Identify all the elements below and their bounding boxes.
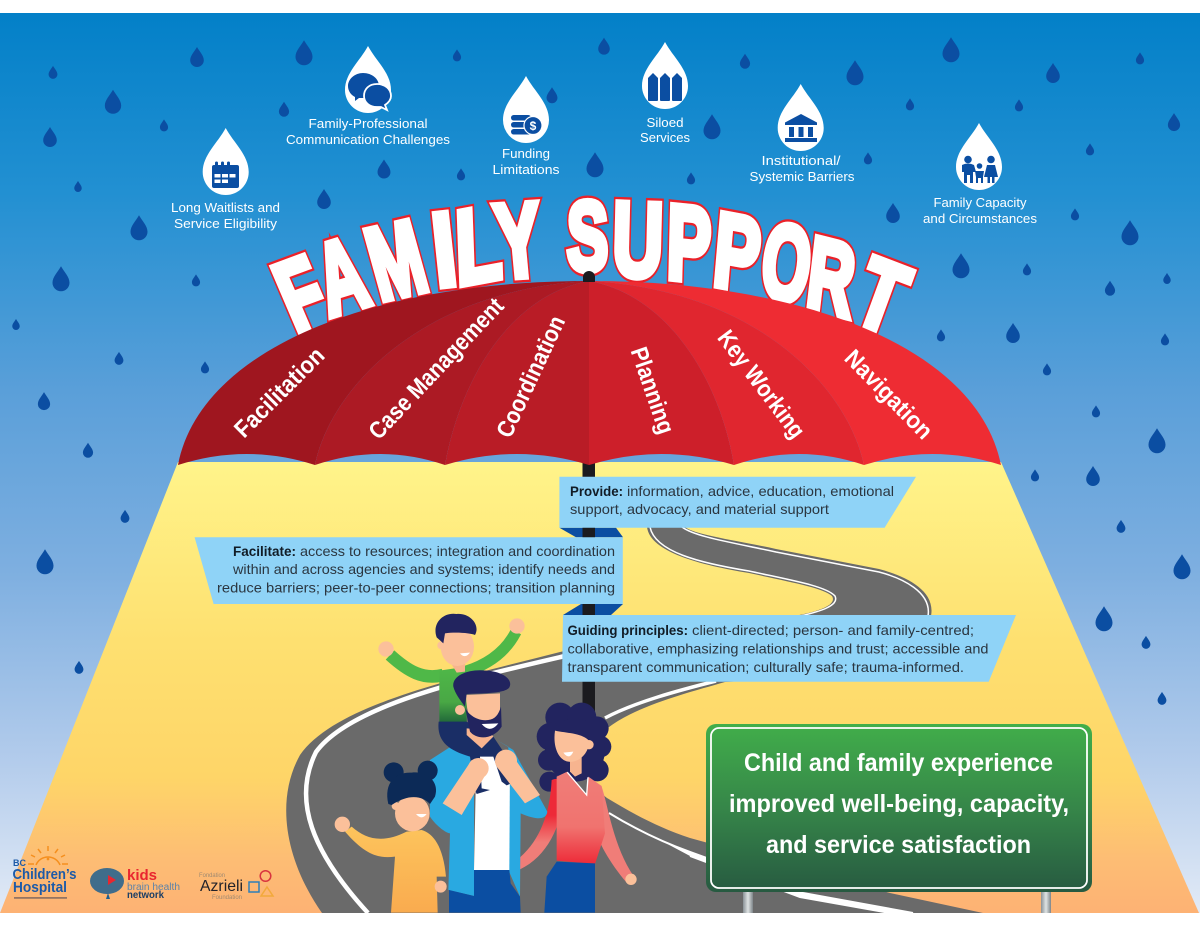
barrier: institutional barriers: Institutional/ (762, 153, 841, 168)
logo: kids brain health network: kids (127, 867, 157, 884)
ribbon connector lower (563, 604, 623, 615)
barrier: communication challenges: Communication Challenges (286, 132, 451, 147)
barrier: siloed services (640, 42, 690, 145)
title: FAMILY SUPPORT (260, 180, 921, 356)
logo: BC Children's Hospital: Children’s (12, 866, 76, 883)
info box: Guiding principles: collaborative, emphasizing relationships and trust; accessible and (568, 640, 988, 656)
info box: Facilitate: within and across agencies and systems; identify needs and (232, 561, 615, 577)
distant winding road (647, 527, 932, 616)
result sign: improved well-being, capacity, (729, 790, 1069, 818)
icon: silos (648, 73, 682, 101)
info box: Guiding principles: client-directed; person- and family-centred; (692, 622, 974, 638)
sign posts (743, 892, 1051, 913)
info box: Guiding principles (562, 615, 1016, 682)
info box: Provide: support, advocacy, and material support (570, 501, 829, 517)
label: Navigation: Navigation (839, 345, 938, 445)
info box: Provide (559, 477, 916, 528)
icon: family figures (962, 156, 998, 183)
barrier: long waitlists (171, 128, 280, 231)
icon: coins: $ (530, 119, 537, 133)
info box: Provide: information, advice, education, emotional (627, 483, 894, 499)
family illustration (335, 614, 637, 913)
canopy panel: Key Working (589, 281, 864, 465)
figure: mother (520, 703, 637, 913)
info box: Facilitate: access to resources; integration and coordination (300, 543, 615, 559)
barrier: funding limitations: Funding (502, 146, 550, 161)
label: Facilitation: Facilitation (229, 342, 330, 443)
sign board (706, 724, 1092, 892)
barrier: funding limitations (492, 76, 560, 177)
info box: Facilitate (195, 537, 623, 604)
logo: kids brain health network (90, 867, 180, 901)
raindrops (12, 37, 1190, 705)
barrier: communication challenges: Family-Professional (308, 116, 428, 131)
figure: girl (335, 761, 447, 913)
logo: Azrieli Foundation: Foundation (212, 895, 242, 901)
brain mark (90, 868, 124, 899)
barrier: funding limitations: Limitations (492, 162, 560, 177)
logo: BC Children's Hospital: Hospital (13, 879, 67, 896)
logo: Azrieli Foundation (199, 871, 273, 901)
barrier: family capacity: and Circumstances (923, 211, 1037, 226)
logo: Azrieli Foundation: Fondation (199, 873, 225, 879)
barrier: family capacity: Family Capacity (934, 195, 1027, 210)
figure: boy (378, 614, 525, 725)
label: Key Working: Key Working (712, 325, 810, 444)
result sign: Child and family experience (744, 749, 1053, 777)
info box: Facilitate: Facilitate: (233, 543, 296, 559)
barrier: siloed services: Services (640, 130, 690, 145)
main road (286, 615, 983, 913)
umbrella pole (582, 462, 595, 712)
light cone under umbrella (0, 462, 1199, 913)
info box: Guiding principles: transparent communication; culturally safe; trauma-informed. (568, 659, 964, 675)
canopy panel: Coordination (445, 281, 589, 465)
figure: father (430, 670, 547, 913)
label: Case Management: Case Management (364, 293, 510, 445)
barrier: communication challenges (286, 46, 451, 147)
logo: Azrieli Foundation: Azrieli (200, 878, 243, 895)
canopy panel: Navigation (589, 281, 1001, 465)
barrier: institutional barriers (750, 84, 855, 184)
pole over connectors (582, 527, 595, 615)
canopy panel: Planning (589, 281, 734, 465)
icon: speech bubbles (348, 73, 391, 110)
icon: institution building (785, 114, 817, 142)
barrier: siloed services: Siloed (646, 115, 684, 130)
result sign (706, 724, 1092, 913)
barrier: long waitlists: Service Eligibility (174, 216, 278, 231)
ribbon connector upper (559, 528, 623, 537)
logo: kids brain health network: brain health (127, 882, 180, 893)
info box: Guiding principles: Guiding principles: (568, 622, 688, 638)
result sign: and service satisfaction (766, 831, 1031, 859)
label: Planning: Planning (625, 344, 680, 438)
logo: BC Children's Hospital (12, 846, 76, 899)
logo: BC Children's Hospital: BC (13, 858, 26, 868)
barrier: long waitlists: Long Waitlists and (171, 200, 280, 215)
icon: calendar (212, 162, 239, 188)
info box: Provide: Provide: (570, 483, 623, 499)
umbrella canopy (178, 271, 1001, 465)
geometric shapes mark (249, 871, 273, 896)
umbrella tip (583, 271, 595, 282)
canopy panel: Facilitation (178, 281, 589, 465)
info box: Facilitate: reduce barriers; peer-to-peer connections; transition planning (217, 580, 615, 596)
barrier: institutional barriers: Systemic Barriers (750, 169, 855, 184)
label: Coordination: Coordination (491, 312, 571, 442)
barrier: family capacity (923, 123, 1037, 226)
sun mark (28, 846, 68, 865)
logo: kids brain health network: network (127, 890, 164, 901)
canopy panel: Case Management (315, 281, 589, 465)
